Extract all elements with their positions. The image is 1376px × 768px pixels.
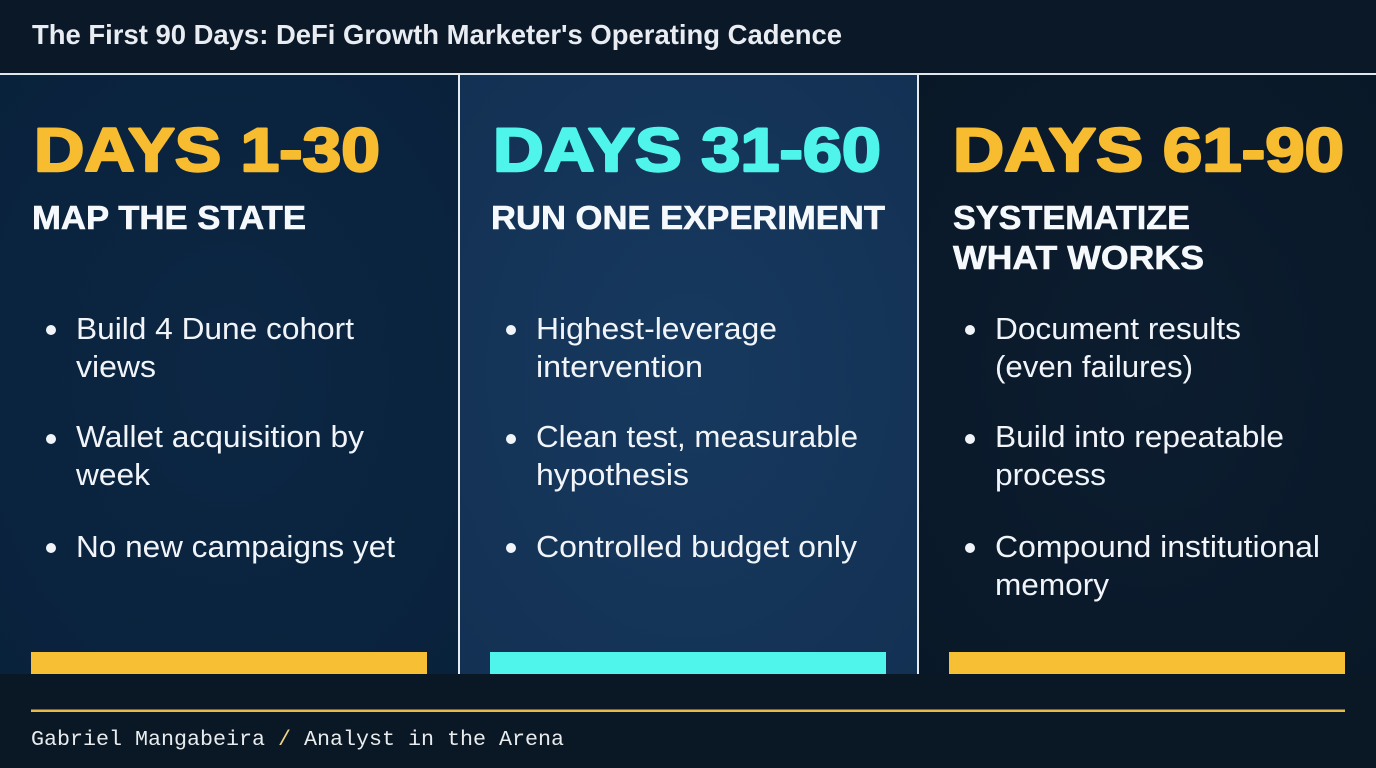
- accent bar: gold: [949, 652, 1345, 674]
- subheading: run one experiment: RUN ONE EXPERIMENT: [491, 200, 886, 237]
- subheading: systematize what works: [953, 200, 1204, 277]
- bullet list: days 61-90: (even failures): [995, 349, 1193, 384]
- header band: [0, 0, 1376, 73]
- bullet list: days 61-90: [965, 311, 1320, 602]
- bullet list: days 1-30: [46, 311, 395, 564]
- panel: days 31-60: [460, 75, 917, 674]
- bullet list: days 1-30: views: [76, 349, 156, 384]
- bullet list: days 61-90: process: [995, 457, 1106, 492]
- bullet list: days 61-90: memory: [995, 567, 1110, 602]
- bullet list: days 31-60: hypothesis: [536, 457, 689, 492]
- bullet list: days 31-60: Highest-leverage: [536, 311, 777, 346]
- footer band: [0, 674, 1376, 768]
- bullet list: days 31-60: [506, 311, 858, 564]
- bullet list: days 1-30: No new campaigns yet: [76, 529, 395, 564]
- heading: days 31-60: DAYS 31-60: [493, 116, 881, 184]
- bullet list: days 31-60: Clean test, measurable: [536, 419, 858, 454]
- panel: days 1-30: [0, 75, 458, 674]
- title: The First 90 Days: DeFi Growth Marketer's Operating Cadence: [32, 19, 842, 50]
- subheading: systematize what works: SYSTEMATIZE: [953, 200, 1190, 237]
- accent bar: cyan: [490, 652, 886, 674]
- bullet list: days 1-30: Wallet acquisition by: [76, 419, 365, 454]
- subheading: systematize what works: WHAT WORKS: [953, 240, 1204, 277]
- bullet list: days 61-90: Document results: [995, 311, 1241, 346]
- bullet list: days 31-60: intervention: [536, 349, 703, 384]
- footer rule: [31, 710, 1345, 712]
- bullet list: days 61-90: Build into repeatable: [995, 419, 1284, 454]
- bullet list: days 1-30: week: [75, 457, 151, 492]
- heading: days 61-90: DAYS 61-90: [953, 116, 1344, 184]
- panel: days 61-90: [919, 75, 1376, 674]
- heading: days 1-30: DAYS 1-30: [34, 116, 380, 184]
- subheading: map the state: MAP THE STATE: [32, 200, 306, 237]
- bullet list: days 1-30: Build 4 Dune cohort: [76, 311, 354, 346]
- footer credit: Gabriel Mangabeira / Analyst in the Arena: [31, 727, 564, 752]
- bullet list: days 31-60: Controlled budget only: [536, 529, 858, 564]
- bullet list: days 61-90: Compound institutional: [995, 529, 1320, 564]
- accent bar: gold: [31, 652, 427, 674]
